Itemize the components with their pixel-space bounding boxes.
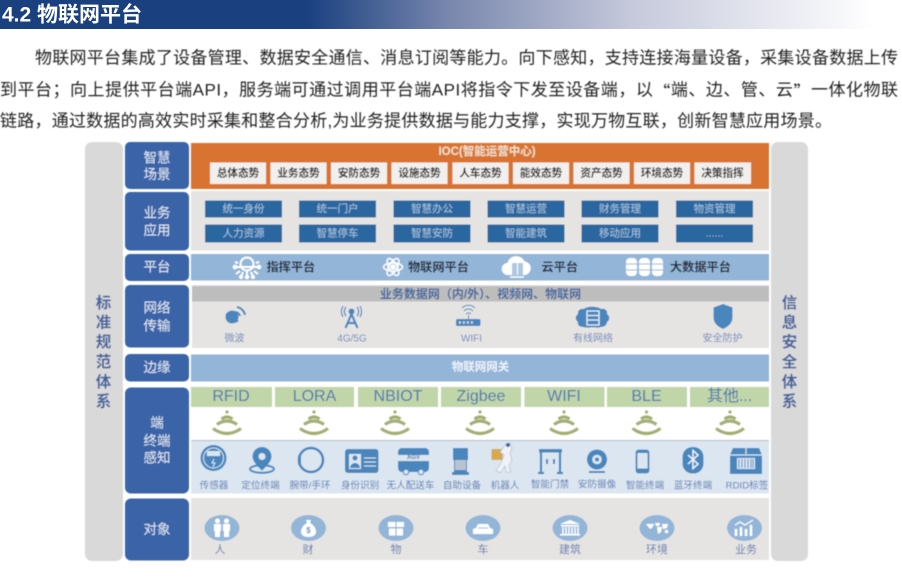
layer label: platform [125, 254, 189, 281]
panel: platform [191, 254, 769, 280]
icon: security camera [587, 450, 607, 473]
icon: smart terminal [636, 450, 648, 472]
panel: network transport: 安全防护 [702, 332, 742, 344]
layer label: business applications: 业务 [144, 206, 170, 220]
icon: money bag [291, 515, 326, 541]
panel: terminal devices: 定位终端 [241, 480, 280, 492]
intro paragraph: 链路，通过数据的高效实时采集和整合分析,为业务提供数据与能力支撑，实现万物互联，创新智慧应用场景。 [0, 112, 832, 130]
icon: WiFi router [456, 305, 480, 326]
icon: AGV delivery vehicle [398, 448, 429, 475]
icon: 4G/5G tower [342, 306, 361, 328]
icon: bluetooth terminal [682, 447, 704, 474]
left sidebar: standards system: 系 [96, 392, 111, 410]
left sidebar: standards system: 规 [96, 332, 112, 350]
protocol row: 其他... [707, 387, 752, 405]
layer label: terminal sensing: 感知 [144, 450, 170, 466]
icon: goods gift [378, 515, 414, 541]
protocol row [191, 387, 769, 407]
right sidebar: security system: 信 [782, 294, 797, 312]
icon: wristband [298, 448, 323, 472]
panel: terminal devices: 传感器 [200, 480, 229, 492]
panel: smart scenes: 设施态势 [398, 166, 441, 180]
intro paragraph: 到平台；向上提供平台端API，服务端可通过调用平台端API将指令下发至设备端，以“端、边、管、云”一体化物联 [0, 78, 898, 102]
icon: AGV delivery vehicle: AGV [407, 455, 420, 461]
right sidebar: security system: 安 [782, 332, 797, 350]
icon: identity card [345, 449, 378, 473]
icon: sensor [200, 445, 226, 471]
panel: platform: 大数据平台 [670, 259, 731, 274]
panel: network transport [192, 285, 769, 348]
panel: business applications: 智慧安防 [411, 226, 453, 240]
panel: edge gateway [191, 354, 769, 382]
panel: objects: 建筑 [559, 542, 581, 556]
panel: terminal devices: 腕带/手环 [289, 480, 331, 492]
intro paragraph [0, 48, 898, 130]
icon: command platform [233, 258, 261, 279]
protocol row: WIFI [547, 388, 581, 405]
layer label: terminal sensing: 端 [150, 416, 164, 430]
protocol row: RFID [212, 388, 250, 405]
panel: network transport: WIFI [461, 334, 482, 344]
icon: people [204, 515, 240, 541]
panel: business applications: ...... [706, 228, 723, 240]
panel: objects: 环境 [646, 542, 668, 556]
layer label: business applications [125, 192, 189, 250]
panel: smart scenes: 业务态势 [277, 166, 320, 180]
layer label: edge: 边缘 [144, 360, 170, 375]
panel: objects: 人 [214, 543, 226, 556]
panel: terminal devices: 身份识别 [341, 480, 379, 492]
panel: smart scenes [191, 143, 769, 189]
icon: self-service device [452, 448, 469, 475]
section title bar: 4.2 物联网平台 [2, 2, 142, 26]
intro paragraph: 物联网平台集成了设备管理、数据安全通信、消息订阅等能力。向下感知，支持连接海量设备，采集设备数据上传 [35, 48, 898, 68]
panel: terminal devices: 无人配送车 [387, 480, 435, 492]
panel: smart scenes: 资产态势 [580, 166, 623, 180]
icon: environment world map [640, 515, 674, 541]
icon: location terminal [250, 447, 274, 473]
icon: microwave [226, 307, 245, 324]
panel: terminal devices: 智能门禁 [531, 478, 570, 490]
icon: cloud platform [502, 256, 531, 277]
panel: smart scenes: 安防态势 [338, 166, 381, 180]
protocol row: Zigbee [457, 388, 506, 405]
layer label: terminal sensing: 终端 [144, 434, 170, 448]
signal icons [213, 410, 744, 434]
layer label: business applications: 应用 [144, 222, 170, 238]
layer label: smart scenes: 智慧 [144, 150, 170, 166]
panel: business applications [191, 191, 769, 250]
layer label: platform: 平台 [144, 260, 170, 274]
panel: business applications: 移动应用 [599, 226, 641, 240]
panel: smart scenes: 人车态势 [459, 166, 502, 180]
panel: edge gateway: 物联网网关 [452, 360, 510, 374]
panel: smart scenes: 决策指挥 [701, 166, 744, 180]
layer label: network transport [125, 285, 189, 348]
panel: smart scenes: IOC(智能运营中心) [438, 144, 536, 158]
panel: platform: 云平台 [542, 259, 578, 274]
panel: business applications: 物资管理 [694, 202, 736, 215]
icon: RFID tag box [730, 448, 762, 474]
protocol row: LORA [293, 388, 337, 405]
icon: IoT atom [384, 257, 402, 277]
panel: terminal devices: 自助设备 [443, 480, 482, 492]
icon: big data cylinders [626, 258, 663, 276]
panel: network transport: 业务数据网（内/外）、视频网、物联网 [380, 286, 581, 301]
left sidebar: standards system: 体 [96, 372, 112, 390]
panel: terminal devices: 智能终端 [626, 480, 665, 492]
layer label: edge [125, 354, 189, 382]
panel: business applications: 统一门户 [316, 202, 358, 215]
icon: smart gate [538, 449, 563, 473]
layer label: objects [125, 498, 189, 560]
layer label: network transport: 网络 [144, 300, 171, 316]
icon: wired network cloud [576, 307, 609, 328]
right sidebar: security system: 息 [782, 312, 797, 331]
panel: objects: 财 [302, 542, 314, 556]
layer label: terminal sensing [125, 388, 189, 494]
left sidebar: standards system [85, 142, 123, 561]
right sidebar: security system: 体 [782, 372, 798, 390]
icon: security shield [714, 304, 732, 329]
panel: business applications: 统一身份 [222, 202, 265, 215]
panel: network transport: 微波 [224, 332, 244, 344]
panel: platform: 指挥平台 [266, 259, 315, 274]
layer label: smart scenes [125, 142, 189, 189]
panel: business applications: 人力资源 [222, 226, 265, 240]
panel: business applications: 财务管理 [599, 202, 641, 215]
protocol row: BLE [631, 388, 662, 405]
icon: money bag: $ [306, 526, 311, 535]
icon: robot [492, 443, 512, 473]
icon: business chart [727, 515, 762, 541]
panel: network transport: 有线网络 [573, 332, 613, 344]
icon: building [552, 515, 588, 541]
panel: network transport: 4G/5G [337, 334, 367, 344]
panel: terminal devices: 蓝牙终端 [674, 480, 713, 492]
panel: terminal devices: 机器人 [491, 480, 520, 492]
layer label: smart scenes: 场景 [144, 167, 170, 182]
left sidebar: standards system: 范 [96, 352, 112, 370]
panel: smart scenes: 能效态势 [520, 166, 563, 180]
panel: platform: 物联网平台 [408, 259, 469, 274]
architecture diagram [85, 142, 808, 561]
layer label: objects: 对象 [144, 522, 170, 537]
panel: objects: 业务 [735, 543, 757, 556]
panel: business applications: 智慧办公 [411, 202, 453, 215]
left sidebar: standards system: 标 [96, 294, 112, 312]
panel: objects [191, 498, 769, 560]
panel: business applications: 智慧运营 [505, 202, 547, 215]
right sidebar: security system: 系 [782, 392, 797, 410]
panel: terminal devices: 安防摄像 [578, 478, 617, 490]
icon: vehicle [466, 515, 500, 541]
layer label: network transport: 传输 [144, 318, 171, 334]
section title bar [0, 0, 902, 29]
panel: smart scenes: 总体态势 [217, 166, 260, 180]
panel: terminal devices [191, 440, 769, 494]
panel: terminal devices: RDID标签 [726, 480, 769, 492]
protocol row: NBIOT [374, 388, 423, 405]
panel: business applications: 智能建筑 [505, 226, 547, 240]
right sidebar: security system: 全 [782, 352, 798, 370]
left sidebar: standards system: 准 [96, 313, 112, 331]
panel: objects: 车 [478, 542, 488, 556]
right sidebar: security system [771, 142, 808, 561]
panel: business applications: 智慧停车 [316, 226, 358, 240]
panel: smart scenes: 环境态势 [641, 166, 684, 180]
panel: objects: 物 [390, 542, 402, 556]
